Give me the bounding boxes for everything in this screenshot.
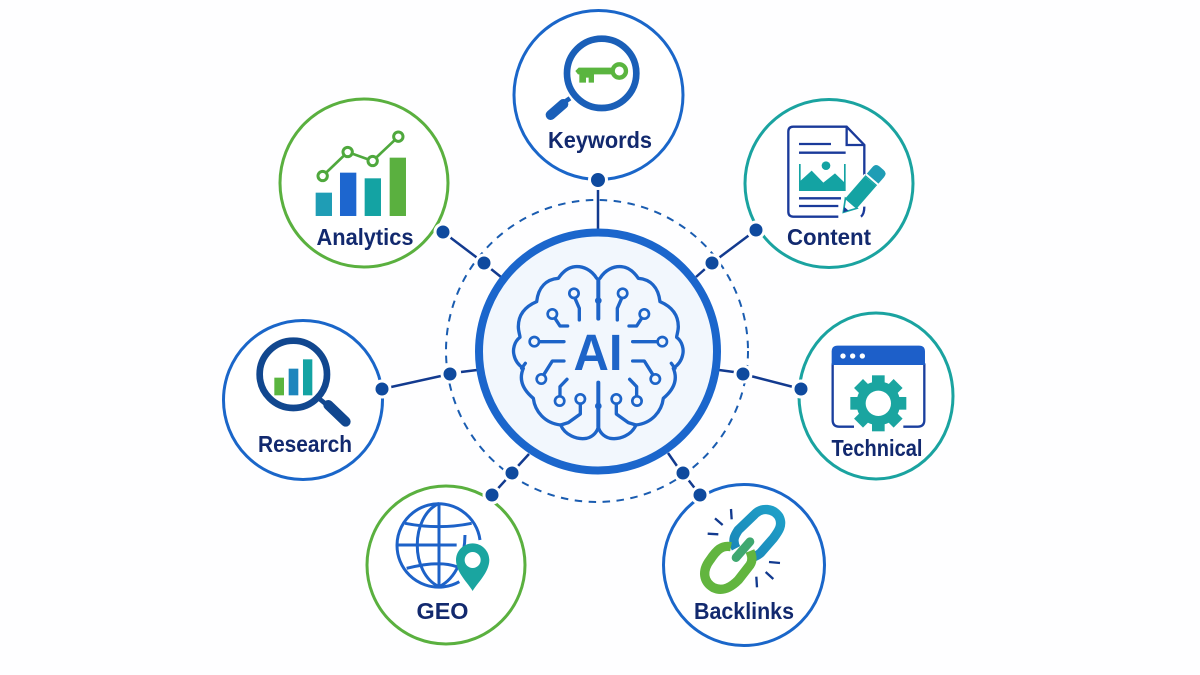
- connector: GEO: [492, 454, 529, 495]
- connector: Technical: [719, 370, 801, 389]
- connector: Research: [382, 370, 477, 389]
- brain icon: [514, 267, 683, 439]
- icon: magnifier with bars: [260, 341, 346, 422]
- icon: document and pencil: [788, 127, 888, 218]
- label: GEO: [416, 598, 468, 624]
- right hemisphere: [598, 267, 683, 439]
- label: Research: [258, 431, 352, 457]
- panel: Research: [224, 320, 382, 480]
- icon: chain links: [705, 509, 781, 589]
- label: Content: [787, 224, 871, 250]
- panel: Backlinks: [664, 484, 824, 646]
- connector: Analytics: [443, 232, 501, 277]
- icon: bar chart with trend line: [316, 132, 406, 216]
- connector: Keywords: [597, 180, 599, 229]
- panel: Keywords: [514, 10, 683, 180]
- panel: GEO: [367, 486, 525, 644]
- label: Analytics: [316, 224, 414, 250]
- icon: globe with pin: [397, 503, 489, 591]
- panel: Technical: [799, 313, 953, 479]
- connector: Backlinks: [668, 453, 700, 495]
- panel: Analytics: [280, 99, 448, 267]
- icon: browser window with gear: [832, 346, 925, 431]
- label: Keywords: [548, 127, 652, 153]
- connector nodes: [374, 172, 809, 503]
- left hemisphere: [514, 267, 598, 439]
- icon: magnifier with key: [551, 39, 636, 115]
- central AI brain hub: [479, 232, 717, 470]
- label: Backlinks: [694, 598, 794, 624]
- AI label: AI: [574, 324, 622, 381]
- label: Technical: [832, 435, 922, 461]
- brain midline: [597, 279, 600, 427]
- dashed orbit ring: [446, 200, 748, 502]
- connector: Content: [696, 230, 756, 277]
- hub disc: [479, 232, 717, 470]
- panel: Content: [745, 100, 913, 268]
